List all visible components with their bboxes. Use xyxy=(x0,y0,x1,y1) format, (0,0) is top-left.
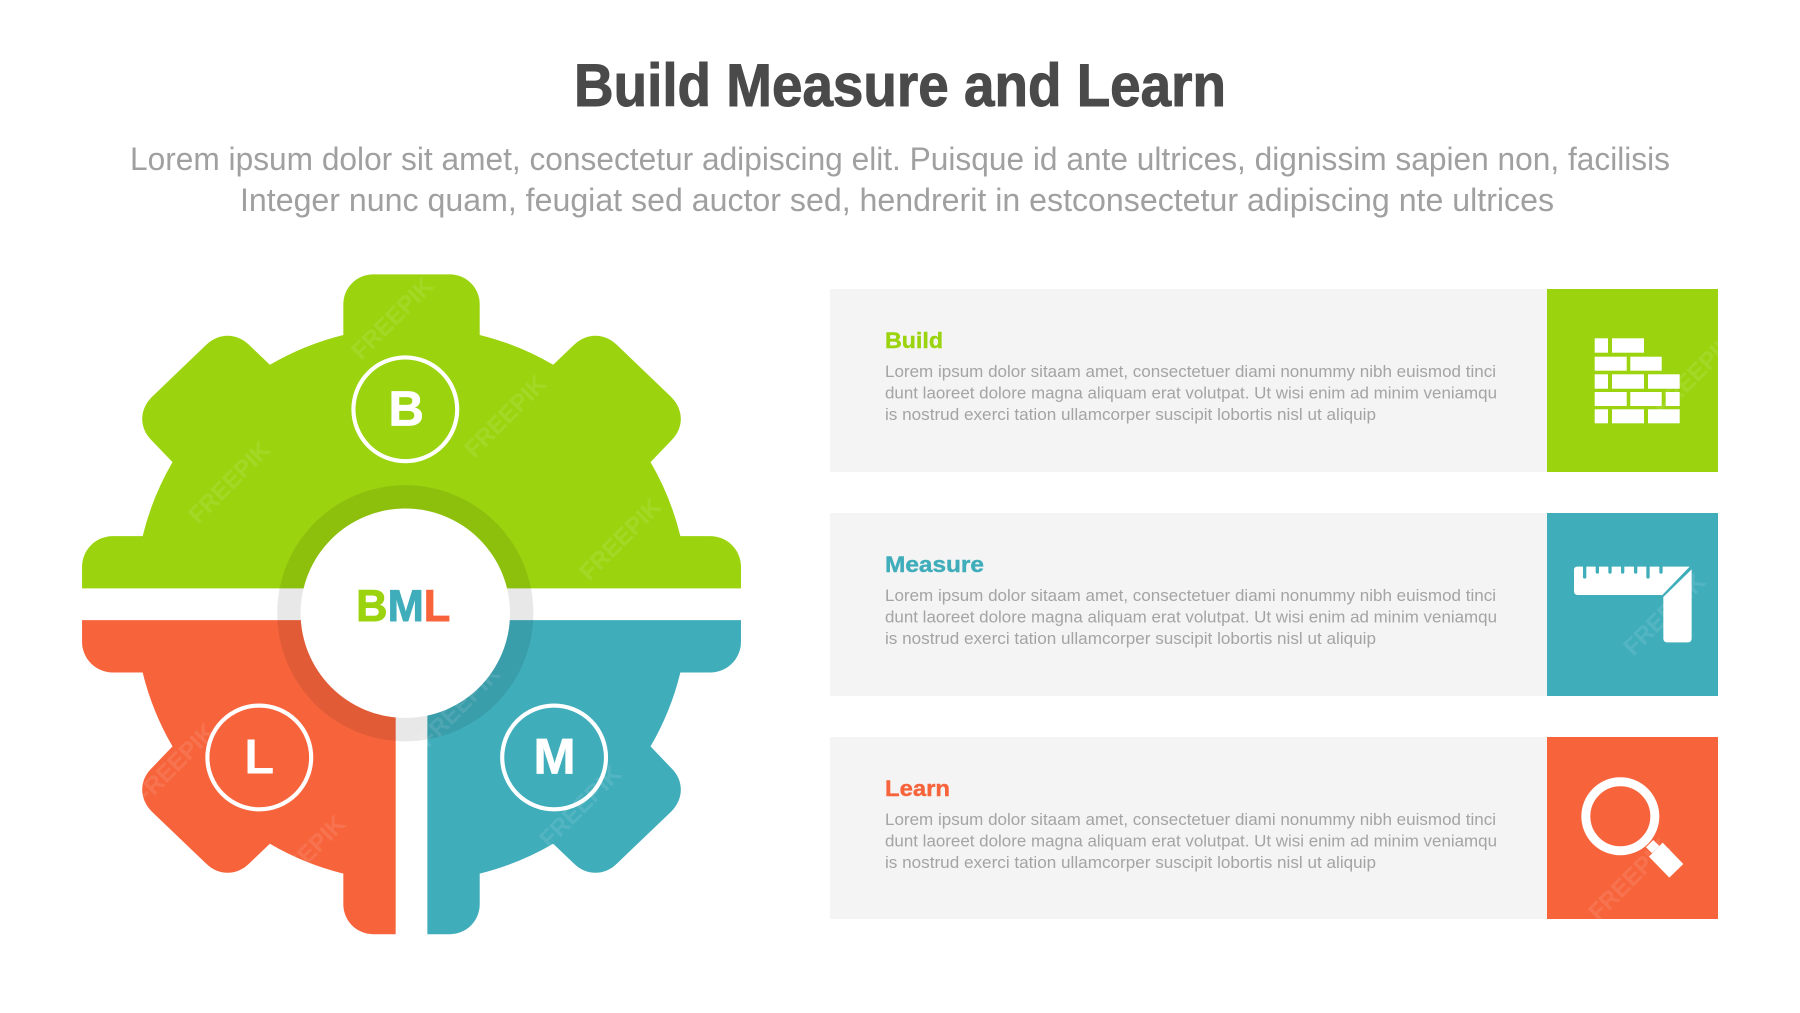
subtitle text block: Lorem ipsum dolor sit amet, consectetur adipiscing elit. Puisque id ante ultrices, dignissim sapien non, facilisis xyxy=(130,141,1670,177)
body text: learn xyxy=(885,810,1497,872)
center label BML: BML xyxy=(356,582,450,631)
body text: measure xyxy=(885,586,1497,648)
watermarks: FREEPIK xyxy=(258,810,351,903)
body text: learn: dunt laoreet dolore magna aliquam erat volutpat. Ut wisi enim ad minim veniamqu xyxy=(885,832,1497,850)
body text: build: is nostrud exerci tation ullamcorper suscipit lobortis nisl ut aliquip xyxy=(885,405,1376,424)
heading: learn: Learn xyxy=(885,776,950,801)
panel: measure xyxy=(830,513,1718,696)
center circle xyxy=(301,509,510,718)
title: Build Measure and Learn xyxy=(574,52,1226,119)
body text: build: Lorem ipsum dolor sitaam amet, consectetuer diami nonummy nibh euismod tinci xyxy=(885,362,1496,381)
watermarks: FREEPIK xyxy=(459,370,552,463)
body text: measure: Lorem ipsum dolor sitaam amet, consectetuer diami nonummy nibh euismod tinci xyxy=(885,586,1496,605)
badge: M: M xyxy=(534,727,576,784)
badge: B: B xyxy=(388,382,424,436)
icon tile: build xyxy=(1547,289,1718,472)
gear segment: build xyxy=(82,274,741,588)
watermarks: FREEPIK xyxy=(183,436,276,529)
center ring xyxy=(277,485,533,741)
panel: learn xyxy=(830,737,1718,919)
body text: learn: Lorem ipsum dolor sitaam amet, consectetuer diami nonummy nibh euismod tinci xyxy=(885,810,1496,829)
body text: build xyxy=(885,362,1497,424)
watermarks: FREEPIK xyxy=(413,660,506,753)
watermarks xyxy=(128,272,1741,926)
badge: B xyxy=(353,357,457,461)
watermarks: FREEPIK xyxy=(1648,328,1741,421)
watermarks: FREEPIK xyxy=(574,493,667,586)
watermarks: FREEPIK xyxy=(346,272,439,365)
watermarks: FREEPIK xyxy=(1583,833,1676,926)
body text: build: dunt laoreet dolore magna aliquam erat volutpat. Ut wisi enim ad minim veniamqu xyxy=(885,384,1497,402)
icon: ruler xyxy=(1574,565,1692,642)
gear segment: measure xyxy=(427,620,741,934)
badge: M xyxy=(502,706,606,809)
badge: L xyxy=(207,706,311,809)
watermarks: FREEPIK xyxy=(128,718,221,811)
heading: measure: Measure xyxy=(885,552,984,577)
icon: bricks xyxy=(1595,338,1680,423)
icon tile: measure xyxy=(1547,513,1718,696)
icon tile: learn xyxy=(1547,737,1718,919)
icon: magnifier xyxy=(1586,782,1683,878)
gear segment: learn xyxy=(82,620,396,934)
heading: build: Build xyxy=(885,328,943,353)
body text: learn: is nostrud exerci tation ullamcorper suscipit lobortis nisl ut aliquip xyxy=(885,853,1376,872)
badge: L: L xyxy=(244,730,274,784)
watermarks: FREEPIK xyxy=(534,760,627,853)
subtitle text block xyxy=(130,141,1670,218)
watermarks: FREEPIK xyxy=(1618,568,1711,661)
panel: build xyxy=(830,289,1718,472)
body text: measure: dunt laoreet dolore magna aliquam erat volutpat. Ut wisi enim ad minim veniamqu xyxy=(885,608,1497,626)
body text: measure: is nostrud exerci tation ullamcorper suscipit lobortis nisl ut aliquip xyxy=(885,629,1376,648)
gear diagram xyxy=(82,274,741,934)
subtitle text block: Integer nunc quam, feugiat sed auctor sed, hendrerit in estconsectetur adipiscing nte ultrices xyxy=(240,182,1554,218)
